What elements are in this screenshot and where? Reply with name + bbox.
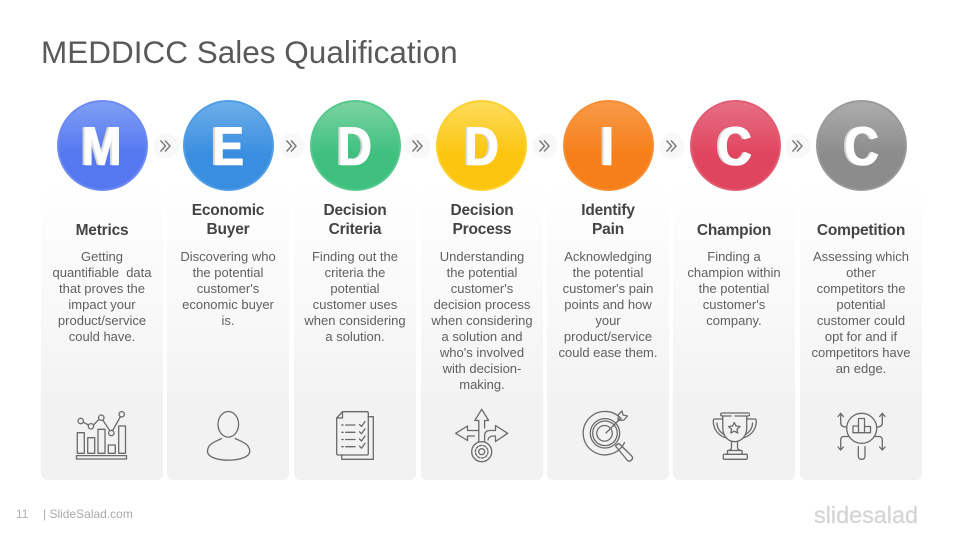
arrow: C to C [786,134,810,158]
panel: Metrics [41,185,163,480]
text: Decision Criteria description [304,249,406,344]
icon: branching arrows with gear [455,408,508,462]
text: Identify Pain description: your [595,313,621,328]
heading: Decision Process: Decision [450,202,514,219]
text: Champion description: customer's [703,297,765,312]
arrow: I to C [660,134,684,158]
panel: Champion [673,185,795,480]
icon: person [206,410,250,461]
text: Competition description: competitors the [817,281,905,296]
text: Metrics description: impact your [68,297,136,312]
text: Identify Pain description: points and how [564,297,652,312]
badge: C: C [718,115,752,177]
heading: Metrics: Metrics [76,222,128,238]
arrow: E to D [280,134,304,158]
logo wordmark: slidesalad [814,502,918,528]
heading: Decision Criteria: Decision [323,202,386,219]
text: Decision Criteria description: Finding out the [312,249,398,264]
text: Competition description: other [846,265,876,280]
panel: Economic Buyer [167,185,289,480]
title: MEDDICC Sales Qualification [41,34,458,70]
text: Decision Process description: the potential [447,265,517,280]
text: Decision Process description: when considering [431,313,533,328]
text: Decision Process description [431,249,533,392]
badge: C: C [844,115,879,177]
text: Economic Buyer description: is. [222,313,234,328]
text: Competition description: potential [836,297,886,312]
text: Champion description [687,249,781,328]
text: Identify Pain description: could ease them. [558,345,658,360]
heading: Economic Buyer: Buyer [207,221,249,238]
text: Decision Criteria description: when considering [304,313,406,328]
panel: Competition [800,185,922,480]
heading: Champion: Champion [697,222,771,238]
badge: E: E [213,115,244,177]
text: Competition description: opt for and if [825,329,897,344]
text: Champion description: champion within [687,265,781,280]
text: Champion description: Finding a [707,249,761,264]
panel: Decision Criteria [294,185,416,480]
text: Metrics description [52,249,152,344]
text: Competition description: customer could [817,313,905,328]
badge: I: I [601,115,615,177]
text: Competition description: Assessing which [813,249,909,264]
text: Economic Buyer description: the potential [193,265,263,280]
heading: Decision Criteria [323,202,386,238]
icon: bar and line chart [76,411,128,460]
badge: M [56,100,148,191]
text: Metrics description: could have. [69,329,135,344]
text: Champion description: company. [706,313,762,328]
icon: trophy [712,412,757,460]
heading: Decision Process: Process [453,221,511,238]
text: Economic Buyer description: economic buyer [182,297,274,312]
text: Decision Process description: a solution and [442,329,522,344]
text: Decision Process description: customer's [451,281,513,296]
text: Decision Criteria description: potential [330,281,380,296]
text: Identify Pain description: the potential [573,265,643,280]
heading: Economic Buyer [192,202,264,238]
badge: M: M [82,115,122,177]
text: Decision Process description: decision process [434,297,530,312]
text: Decision Process description: making. [459,377,505,392]
badge: D: D [338,115,372,177]
heading: Decision Process [450,202,514,238]
text: Metrics description: quantifiable data [52,265,152,280]
heading: Competition: Competition [817,222,905,238]
text: Decision Criteria description: criteria the [325,265,385,280]
text: Identify Pain description: product/service [564,329,652,344]
icon: magnifier with bars and arrows [837,412,886,460]
text: Decision Criteria description: a solution. [325,329,385,344]
badge: E [183,100,274,191]
heading: Economic Buyer: Economic [192,202,264,219]
heading: Identify Pain: Identify [581,202,635,219]
text: Decision Criteria description: customer uses [313,297,397,312]
arrow: D to D [406,134,430,158]
text: Metrics description: that proves the [59,281,145,296]
page number: 11 [16,507,28,521]
text: Competition description: an edge. [836,361,886,376]
text: Identify Pain description: customer's pain [563,281,653,296]
badge: D [310,100,400,191]
arrow: M to E [154,134,178,158]
heading: Decision Criteria: Criteria [329,221,381,238]
text: Economic Buyer description: Discovering who [180,249,276,264]
text: Decision Process description: with decision- [443,361,521,376]
text: Metrics description: Getting [81,249,123,264]
text: Competition description [812,249,910,376]
text: Economic Buyer description: customer's [197,281,259,296]
text: Decision Process description: Understanding [440,249,524,264]
badge: C [690,100,780,191]
heading: Identify Pain: Pain [592,221,624,238]
text: Decision Process description: who's involved [440,345,524,360]
panel: Identify Pain [547,185,669,480]
text: Identify Pain description: Acknowledging [564,249,652,264]
footer site text: | SlideSalad.com [43,507,133,521]
text: Identify Pain description [558,249,658,360]
icon: checklist documents [336,411,374,460]
badge: C [816,100,907,191]
icon: target with magnifier [582,410,634,462]
arrow: D to I [533,134,557,158]
text: Champion description: the potential [699,281,769,296]
badge: D [436,100,527,191]
badge: D: D [464,115,499,177]
text: Competition description: competitors have [812,345,910,360]
heading: Identify Pain [581,202,635,238]
text: Metrics description: product/service [58,313,146,328]
panel: Decision Process [421,185,543,480]
badge: I [562,100,654,191]
text: Economic Buyer description [180,249,276,328]
